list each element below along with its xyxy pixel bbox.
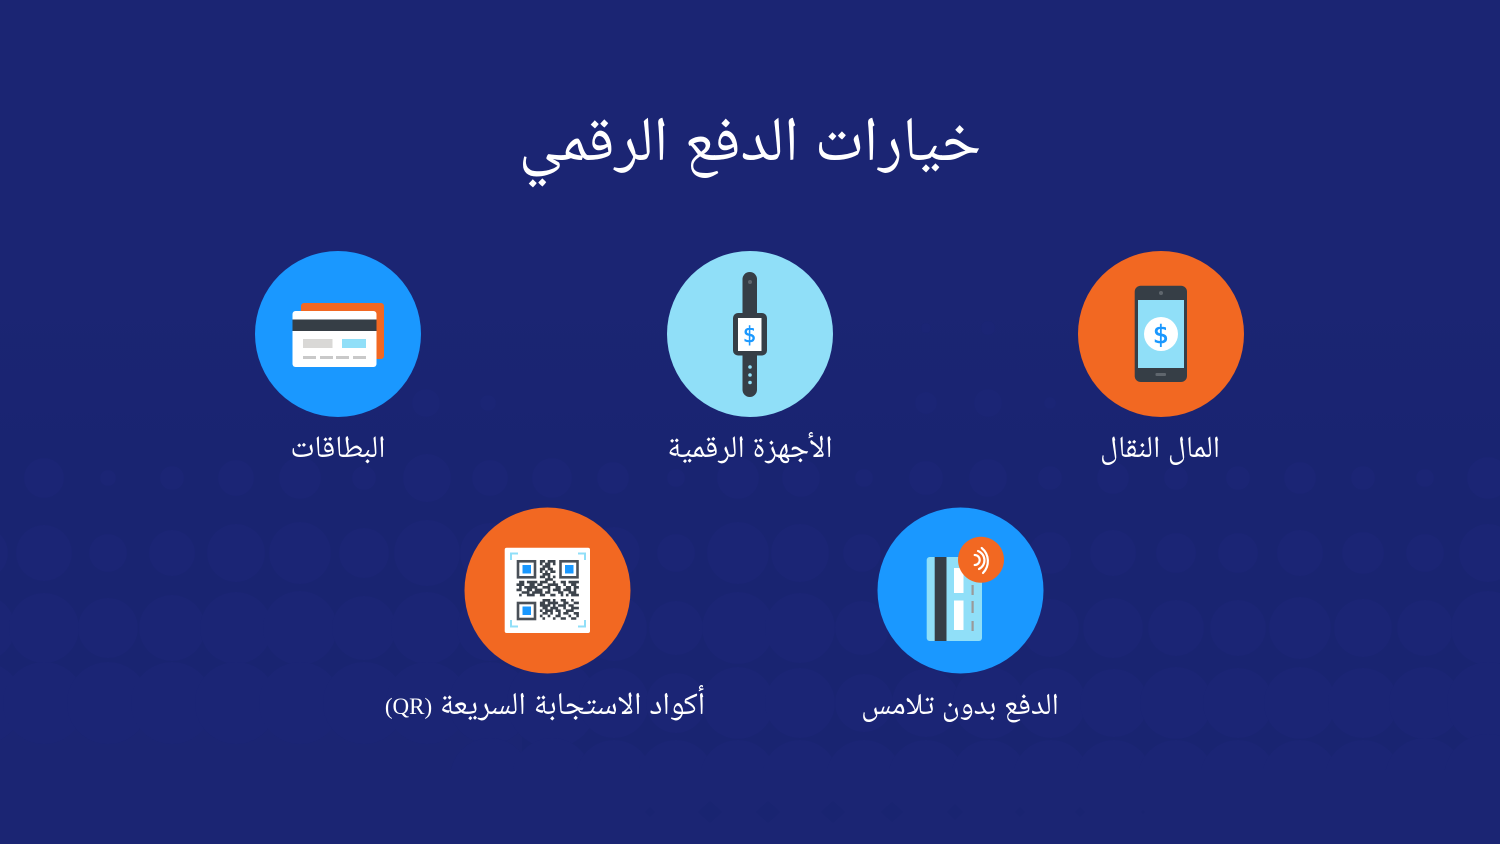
title: خيارات الدفع الرقمي	[519, 104, 981, 174]
label: mobile money: المال النقال	[1100, 430, 1220, 464]
icon: phone	[1135, 286, 1187, 382]
label: contactless payment: الدفع بدون تلامس	[861, 687, 1059, 721]
icon: contactless card	[927, 537, 1004, 641]
icon: QR code	[505, 548, 590, 633]
icon: smart watch: $	[743, 323, 756, 347]
icon: smart watch	[733, 272, 767, 397]
label: cards: البطاقات	[290, 429, 386, 464]
label: QR codes: أكواد الاستجابة السريعة (QR)	[385, 686, 705, 721]
icon: phone: $	[1153, 320, 1169, 349]
label: digital devices: الأجهزة الرقمية	[667, 429, 833, 464]
icon: credit cards	[292, 303, 384, 367]
